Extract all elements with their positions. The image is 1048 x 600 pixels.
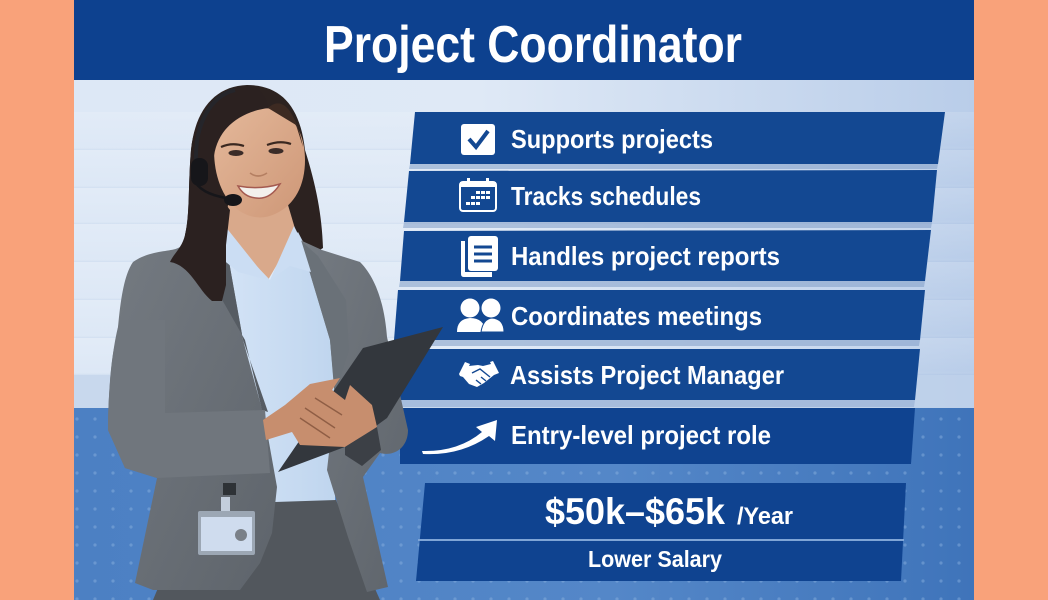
headset	[191, 90, 242, 206]
per year: /Year	[737, 503, 793, 530]
item: entry-level project role	[400, 408, 915, 464]
hair front	[170, 86, 268, 301]
cuff	[345, 427, 381, 466]
nose	[250, 173, 267, 176]
title banner	[74, 0, 974, 80]
item: assists project manager: Assists Project Manager	[510, 360, 784, 390]
neck	[224, 205, 296, 280]
salary range: $50k–$65k	[545, 491, 725, 532]
panel: responsibilities list	[393, 112, 945, 464]
item: handles project reports: Handles project reports	[511, 241, 780, 271]
jacket left front	[108, 228, 277, 590]
item: assists project manager	[395, 349, 920, 407]
salary note: Lower Salary	[588, 546, 722, 572]
item: supports projects	[409, 112, 945, 169]
item: supports projects: Supports projects	[511, 124, 713, 154]
item: tracks schedules	[403, 170, 937, 228]
eyes and brows	[221, 142, 291, 156]
hair back	[185, 85, 323, 262]
item: coordinates meetings: Coordinates meetings	[511, 301, 762, 331]
item: handles project reports	[399, 230, 931, 287]
title banner: Project Coordinator	[324, 16, 742, 74]
lapel right	[300, 240, 349, 395]
collar	[221, 226, 311, 280]
item: entry-level project role: Entry-level project role	[511, 420, 771, 450]
illustration: woman with headset and clipboard	[108, 85, 443, 600]
item: coordinates meetings	[393, 290, 925, 346]
smile	[238, 184, 280, 198]
face	[214, 108, 305, 217]
item: tracks schedules: Tracks schedules	[511, 181, 701, 211]
clipboard	[278, 327, 443, 472]
forearm	[108, 320, 270, 478]
lapel left	[212, 228, 268, 412]
ID badge and lanyard	[198, 483, 255, 555]
shirt	[224, 232, 337, 503]
panel: salary	[416, 483, 906, 581]
jacket right front	[300, 240, 408, 592]
pants	[153, 500, 380, 600]
hair right highlight	[268, 103, 303, 147]
hands	[263, 378, 377, 447]
